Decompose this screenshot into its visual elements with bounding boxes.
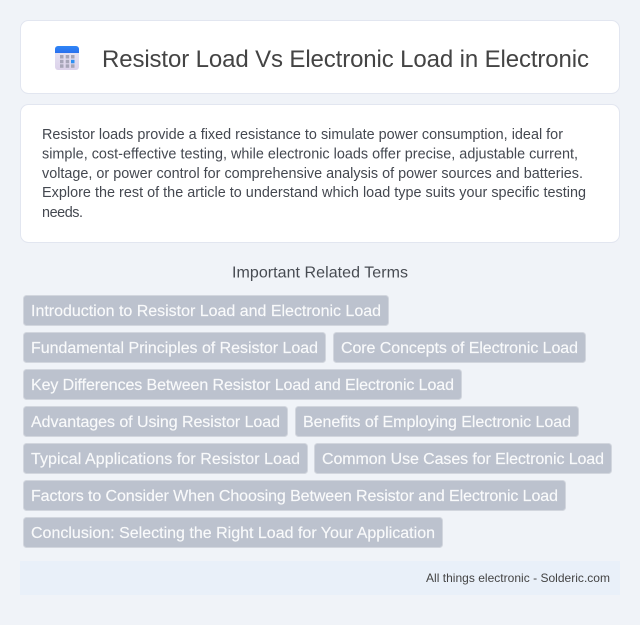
icon: calendar: [55, 46, 79, 70]
footer credit: All things electronic - Solderic.com: [426, 571, 610, 585]
tag: key differences: Key Differences Between Resistor Load and Electronic Load: [31, 377, 454, 394]
text block: summary: [42, 127, 586, 221]
tag: conclusion: Conclusion: Selecting the Right Load for Your Application: [31, 525, 435, 542]
panel: summary card: [20, 104, 620, 242]
footer: [20, 561, 620, 595]
tag: core concepts: [334, 332, 586, 362]
tag: common use cases: Common Use Cases for Electronic Load: [322, 451, 604, 468]
tag: benefits: [296, 406, 578, 436]
text block: summary: simple, cost-effective testing, while electronic loads offer precise, adjustable current,: [42, 146, 578, 162]
tag: advantages: Advantages of Using Resistor Load: [31, 414, 280, 431]
tag: fundamental principles: Fundamental Principles of Resistor Load: [31, 340, 318, 357]
text block: summary: Explore the rest of the article to understand which load type suits your specific testing: [42, 185, 586, 201]
tag: benefits: Benefits of Employing Electronic Load: [303, 414, 571, 431]
tag: introduction: [24, 296, 388, 326]
tag: advantages: [24, 406, 288, 436]
heading: related terms: Important Related Terms: [232, 264, 408, 282]
text block: summary: Resistor loads provide a fixed resistance to simulate power consumption, ideal for: [42, 127, 563, 143]
tag: factors to consider: Factors to Consider When Choosing Between Resistor and Electronic Load: [31, 488, 558, 505]
tag: factors to consider: [24, 480, 566, 510]
tag: typical applications: [24, 444, 308, 474]
tag: introduction: Introduction to Resistor Load and Electronic Load: [31, 303, 381, 320]
tag: fundamental principles: [24, 332, 326, 362]
tag: key differences: [24, 370, 462, 400]
text block: summary: needs.: [42, 205, 83, 221]
tag: conclusion: [24, 518, 442, 548]
tag: core concepts: Core Concepts of Electronic Load: [341, 340, 578, 357]
tag: common use cases: [314, 444, 612, 474]
tag: typical applications: Typical Applications for Resistor Load: [31, 451, 300, 468]
text block: summary: voltage, or power control for comprehensive analysis of power sources and batteries.: [42, 166, 583, 182]
panel: header card: [20, 20, 620, 94]
tag list: related terms: [24, 296, 612, 548]
title: Resistor Load Vs Electronic Load in Electronic: [102, 46, 589, 73]
